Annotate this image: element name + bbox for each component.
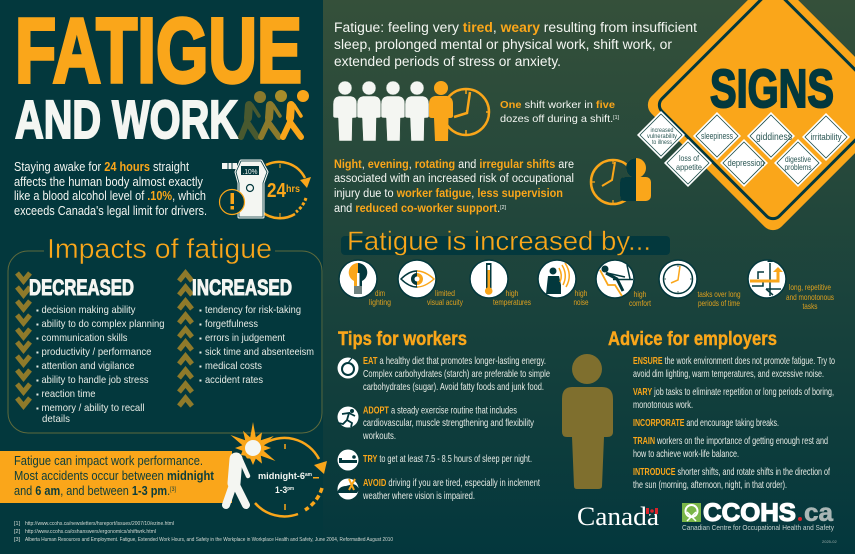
list: decreased <box>29 275 165 425</box>
icon: tired worker with clock: pm <box>287 486 294 492</box>
sign: increased vulnerability to illness: to illness <box>652 140 672 146</box>
logo: CCOHS: CCOHS <box>703 499 796 527</box>
text: avoid <box>362 477 540 502</box>
panel: right background <box>323 0 855 554</box>
logo: CCOHS <box>682 499 834 532</box>
text block: shift work risks: and reduced co-worker support. <box>334 203 504 215</box>
text: adopt <box>362 404 535 442</box>
sign: increased vulnerability to illness: increased <box>650 128 674 134</box>
icon: dim lighting <box>339 260 391 307</box>
sign: loss of appetite: appetite <box>676 162 702 172</box>
icon: tired worker with clock: 1-3 <box>275 485 289 496</box>
list: increased: ▪ <box>199 348 202 357</box>
icon: tired worker with clock <box>226 422 327 516</box>
icon: bed <box>338 450 358 470</box>
list: increased: errors in judgement <box>205 332 285 344</box>
panel: left background <box>0 0 323 554</box>
title: FATIGUE <box>15 0 302 102</box>
icon: tasks over long periods: periods of time <box>698 298 740 308</box>
sign: increased vulnerability to illness <box>637 111 685 159</box>
list: decreased: decision making ability <box>42 304 136 316</box>
list: decreased: ▪ <box>36 334 39 343</box>
text: adopt: cardiovascular, muscle strengthening and flexibility <box>363 417 535 429</box>
list: decreased: ▪ <box>36 320 39 329</box>
text block: one in five: [1] <box>613 115 620 121</box>
footnotes: [1] <box>14 521 21 527</box>
sign: loss of appetite: loss of <box>679 153 700 163</box>
icon: repetitive tasks <box>748 259 834 311</box>
icon: breathalyzer and 24 hour clock: hrs <box>286 184 300 195</box>
text block: 24 hours: Staying awake for 24 hours straight <box>14 160 189 174</box>
title <box>15 0 302 150</box>
footnotes <box>14 521 393 543</box>
icon: breathalyzer and 24 hour clock: .10% <box>242 167 258 176</box>
list: decreased: communication skills <box>42 332 128 344</box>
callout: accident timing band <box>0 451 232 503</box>
list: decreased: ability to do complex planning <box>42 318 165 330</box>
sign: digestive problems: digestive <box>785 155 811 164</box>
text block: shift work risks <box>334 159 574 215</box>
icon: dim lighting: lighting <box>369 297 391 307</box>
text block: advice list <box>633 355 835 491</box>
text block: one in five: One shift worker in five <box>500 99 615 111</box>
list: increased: forgetfulness <box>205 318 258 330</box>
icon: repetitive tasks: tasks <box>802 301 818 311</box>
text block: shift work risks: associated with an increased risk of occupational <box>334 173 574 185</box>
list: decreased: details <box>42 413 70 425</box>
text block: advice list: how to achieve work-life balance. <box>633 448 739 460</box>
text block: definition of fatigue: sleep, prolonged mental or physical work, shift work, or <box>334 37 673 52</box>
sign: depression <box>720 139 768 187</box>
sign: sleepiness: sleepiness <box>701 131 733 141</box>
text block: shift work risks: [2] <box>500 205 506 211</box>
text block: 24 hours <box>14 160 207 218</box>
icon: five workers and clock <box>333 81 490 141</box>
footnotes: http://www.ccohs.ca/newsletters/hsreport/issues/2007/10/ezine.html <box>25 521 174 527</box>
heading: tips for workers: Tips for workers <box>338 329 467 350</box>
list: decreased: ability to handle job stress <box>42 374 148 386</box>
heading: impacts of fatigue: Impacts of fatigue <box>47 233 272 264</box>
heading: fatigue is increased by: Fatigue is increased by... <box>347 226 651 256</box>
icon: limited visual acuity: limited <box>435 288 455 298</box>
heading: advice for employers: Advice for employers <box>608 329 777 350</box>
text block: 24 hours: exceeds Canada's legal limit for drivers. <box>14 204 207 218</box>
footnotes: [2] <box>14 529 21 535</box>
panel: impacts of fatigue <box>8 233 322 433</box>
list: increased: ▪ <box>199 362 202 371</box>
list: increased: tendency for risk-taking <box>205 304 301 316</box>
list: increased: ▪ <box>199 376 202 385</box>
sign: depression: depression <box>728 158 764 168</box>
list: decreased: ▪ <box>36 348 39 357</box>
text block: advice list: INCORPORATE and encourage taking breaks. <box>633 417 779 429</box>
icon: tired worker with clock: am <box>305 472 313 478</box>
list: decreased: productivity / performance <box>42 346 152 358</box>
text block: advice list: the sun (morning, afternoon, night, in that order). <box>633 479 787 491</box>
list: increased: ▪ <box>199 320 202 329</box>
icon: repetitive tasks: and monotonous <box>786 292 834 302</box>
icon: runner <box>338 406 358 428</box>
icon: breathalyzer and 24 hour clock <box>220 161 311 218</box>
list: decreased: ▪ <box>36 306 39 315</box>
text block: definition of fatigue: Fatigue: feeling very tired, weary resulting from insufficient <box>334 20 697 35</box>
sign: giddiness: giddiness <box>756 132 792 143</box>
callout: accident timing band: [3] <box>170 487 176 493</box>
sign: digestive problems <box>774 139 822 187</box>
text block: advice list: monotonous work. <box>633 399 693 411</box>
list: decreased: ▪ <box>36 376 39 385</box>
text block: shift work risks: Night, evening, rotating and irregular shifts are <box>334 159 574 171</box>
icon: up chevrons <box>179 273 192 406</box>
icon: high comfort: high <box>634 289 647 299</box>
text block: one in five <box>500 99 620 125</box>
icon: high temperatures: high <box>506 288 519 298</box>
icon: high noise: noise <box>574 297 589 307</box>
list: decreased: ▪ <box>36 362 39 371</box>
sign: sleepiness <box>693 112 741 160</box>
list: increased: medical costs <box>205 360 262 372</box>
icon: high temperatures: temperatures <box>493 297 531 307</box>
icon: down chevrons <box>17 273 30 406</box>
footnotes: http://www.ccohs.ca/oshanswers/ergonomics/shiftwrk.html <box>25 529 156 535</box>
text block: 24 hours: like a blood alcohol level of .10%, which <box>14 189 206 203</box>
text: eat: EAT a healthy diet that promotes longer-lasting energy. <box>363 355 546 367</box>
logo: CCOHS: ca <box>804 499 834 527</box>
icon: clock and half-shaded person <box>591 158 651 204</box>
text block: 24 hours: affects the human body almost exactly <box>14 175 204 189</box>
icon: apple <box>338 358 358 378</box>
callout: accident timing band: Fatigue can impact work performance. <box>14 454 203 468</box>
text: adopt: workouts. <box>362 430 396 442</box>
sign: giddiness <box>747 112 795 160</box>
icon: person silhouette <box>562 354 613 489</box>
list: decreased: DECREASED <box>29 275 134 300</box>
text block: definition of fatigue: extended periods of stress or anxiety. <box>334 54 561 69</box>
icon: high noise: high <box>574 288 588 298</box>
text block: definition of fatigue <box>334 20 697 69</box>
panel: signs diamond <box>637 0 855 235</box>
sign: increased vulnerability to illness: vulnerability <box>647 134 677 140</box>
text: eat: carbohydrates (sugar). Avoid fatty foods and junk food. <box>363 381 544 393</box>
text: eat: Complex carbohydrates (starch) are preferable to simple <box>363 368 550 380</box>
text block: one in five: dozes off during a shift. <box>500 113 608 125</box>
text block: shift work risks: injury due to worker fatigue, less supervision <box>334 188 563 200</box>
callout: accident timing band: and 6 am, and between 1-3 pm. <box>14 484 172 498</box>
text: avoid: weather where vision is impaired. <box>362 490 475 502</box>
icon: dim lighting: dim <box>375 288 385 298</box>
logo: CCOHS: Canadian Centre for Occupational Health and Safety <box>682 523 834 532</box>
list: increased: sick time and absenteeism <box>205 346 314 358</box>
list: increased: ▪ <box>199 306 202 315</box>
icon: high comfort <box>596 260 651 308</box>
icon: tasks over long periods: tasks over long <box>698 289 741 299</box>
icon: limited visual acuity <box>398 260 464 307</box>
icon: breathalyzer and 24 hour clock: 24 <box>267 180 287 202</box>
icon: limited visual acuity: visual acuity <box>427 297 464 307</box>
icon: tired worker with clock: midnight-6 <box>258 471 307 482</box>
text: try: TRY to get at least 7.5 - 8.5 hours of sleep per night. <box>363 453 532 465</box>
text: adopt: ADOPT a steady exercise routine that includes <box>363 404 517 416</box>
list: increased <box>192 275 314 386</box>
icon: tired walking figures <box>241 90 309 137</box>
sign: digestive problems: problems <box>784 163 812 172</box>
text: avoid: AVOID driving if you are tired, especially in inclement <box>363 477 540 489</box>
list: increased: INCREASED <box>192 275 292 300</box>
icon: tasks over long periods <box>659 260 741 308</box>
sign: irritability: irritability <box>810 132 842 143</box>
footnotes: [3] <box>14 537 21 543</box>
footnotes: Alberta Human Resources and Employment. Fatigue, Extended Work Hours, and Safety in the Workplace in Workplace Health and Safety, June 2004, Reformatted August 2010 <box>25 537 393 543</box>
list: increased: accident rates <box>205 374 263 386</box>
sign: irritability <box>802 113 850 161</box>
list: increased: ▪ <box>199 334 202 343</box>
icon: high comfort: comfort <box>629 298 651 308</box>
list: decreased: attention and vigilance <box>42 360 135 372</box>
list: decreased: ▪ <box>36 390 39 399</box>
callout: accident timing band: Most accidents occur between midnight <box>14 469 215 483</box>
document code: 2025-02 <box>822 539 837 544</box>
list: decreased: reaction time <box>42 388 96 400</box>
list: decreased: memory / ability to recall <box>42 402 144 414</box>
title: AND WORK <box>15 90 238 150</box>
icon: high temperatures <box>470 260 531 307</box>
list: decreased: ▪ <box>36 404 39 413</box>
sign: loss of appetite <box>664 139 712 187</box>
icon: avoid driving <box>337 478 359 500</box>
text: eat <box>363 355 550 393</box>
icon: repetitive tasks: long, repetitive <box>789 282 831 292</box>
logo: Canada wordmark: Canada <box>577 502 659 531</box>
icon: high noise <box>538 260 589 307</box>
